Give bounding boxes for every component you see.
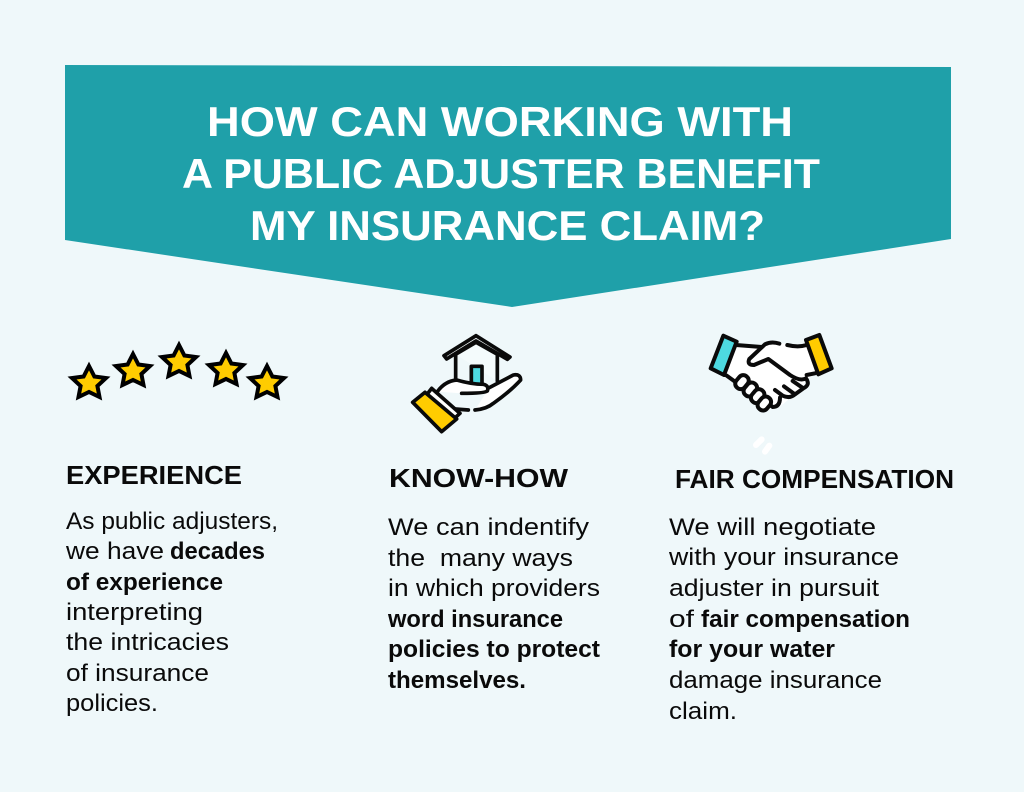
text block: know-how: word insurance [387,606,563,633]
text block: fair compensation: for your water [669,636,835,663]
heading: fair compensation: FAIR COMPENSATION [675,464,954,494]
text block: experience: decades [170,538,265,565]
column: fair compensation [668,464,954,725]
text block: experience: of insurance [66,660,209,687]
text block: know-how: We can indentify [388,514,589,541]
text block: fair compensation: damage insurance [669,667,882,694]
title: A PUBLIC ADJUSTER BENEFIT [182,150,820,197]
text block: experience: interpreting [66,599,203,626]
text block: know-how: in which providers [388,575,600,602]
text block: fair compensation: adjuster in pursuit [669,575,879,602]
title banner [65,65,951,307]
icon: five stars [72,345,284,397]
text block: fair compensation: claim. [669,698,737,725]
text block: fair compensation: with your insurance [668,544,899,571]
title: HOW CAN WORKING WITH [207,98,793,145]
title [182,98,820,249]
column: know-how [387,463,600,694]
text block: fair compensation: We will negotiate [669,514,876,541]
text block: fair compensation: of [669,606,694,633]
column: experience [65,460,278,717]
text block: know-how: policies to protect [388,636,600,663]
text block: experience: As public adjusters, [66,508,278,535]
heading: experience: EXPERIENCE [66,460,242,490]
title: MY INSURANCE CLAIM? [250,202,765,249]
text block: know-how: themselves. [388,667,526,694]
text block: experience: policies. [66,690,158,717]
text block: experience: the intricacies [66,629,229,656]
icon: handshake [711,335,832,452]
text block: experience [65,508,278,717]
text block: know-how: the many ways [388,545,573,572]
text block: know-how [387,514,600,694]
icon: hand holding house [413,336,521,432]
heading: know-how: KNOW-HOW [389,463,569,493]
text block: experience: we have [65,538,164,565]
text block: experience: of experience [66,569,223,596]
text block: fair compensation: fair compensation [701,606,910,633]
text block: fair compensation [668,514,910,725]
